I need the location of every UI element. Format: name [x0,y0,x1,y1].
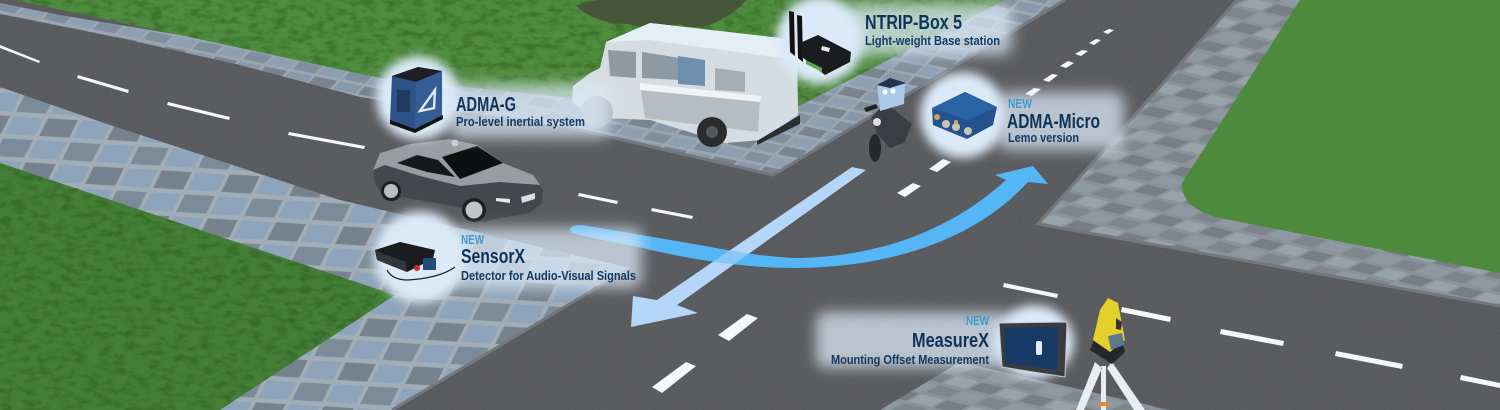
car [373,139,543,222]
grass: top and lower left [0,0,1004,410]
arrow: curved turning path [570,166,1048,268]
tree [576,0,746,27]
arrow: straight crossing path [631,167,866,327]
label: NEW: NEW [1008,97,1032,111]
grass: right [1182,0,1500,273]
callout: NTRIP-Box 5 [776,0,1012,84]
text: Pro-level inertial system [456,114,585,129]
callout: SensorX [374,211,642,303]
heading: ADMA-G [456,94,516,116]
icon: NTRIP-Box device [789,11,851,75]
heading: ADMA-Micro [1007,111,1100,133]
total station on tripod [1076,298,1145,410]
motorcycle with robot rider [864,78,912,162]
icon: SensorX device [375,242,455,280]
heading: MeasureX [912,330,990,352]
icon: tablet [999,322,1067,377]
label: NEW: NEW [461,233,484,247]
text: Lemo version [1008,130,1079,145]
halo [920,72,1124,158]
halo [816,305,1074,379]
text: Mounting Offset Measurement [831,352,990,367]
heading: SensorX [461,246,526,268]
callout: ADMA-G [376,56,610,140]
callout: ADMA-Micro [920,72,1124,158]
text: Detector for Audio-Visual Signals [461,268,636,283]
label: NEW: NEW [966,314,989,328]
grass: lower left shade [0,163,395,410]
icon: ADMA-G device [390,67,443,133]
icon: ADMA-Micro device [932,92,997,139]
van [572,23,800,147]
arrow crossing overlap [714,250,749,264]
text: Light-weight Base station [865,33,1000,48]
heading: NTRIP-Box 5 [865,12,962,34]
halo [374,211,642,303]
callout: MeasureX [816,305,1074,379]
halo [376,56,610,140]
halo [776,0,1012,84]
